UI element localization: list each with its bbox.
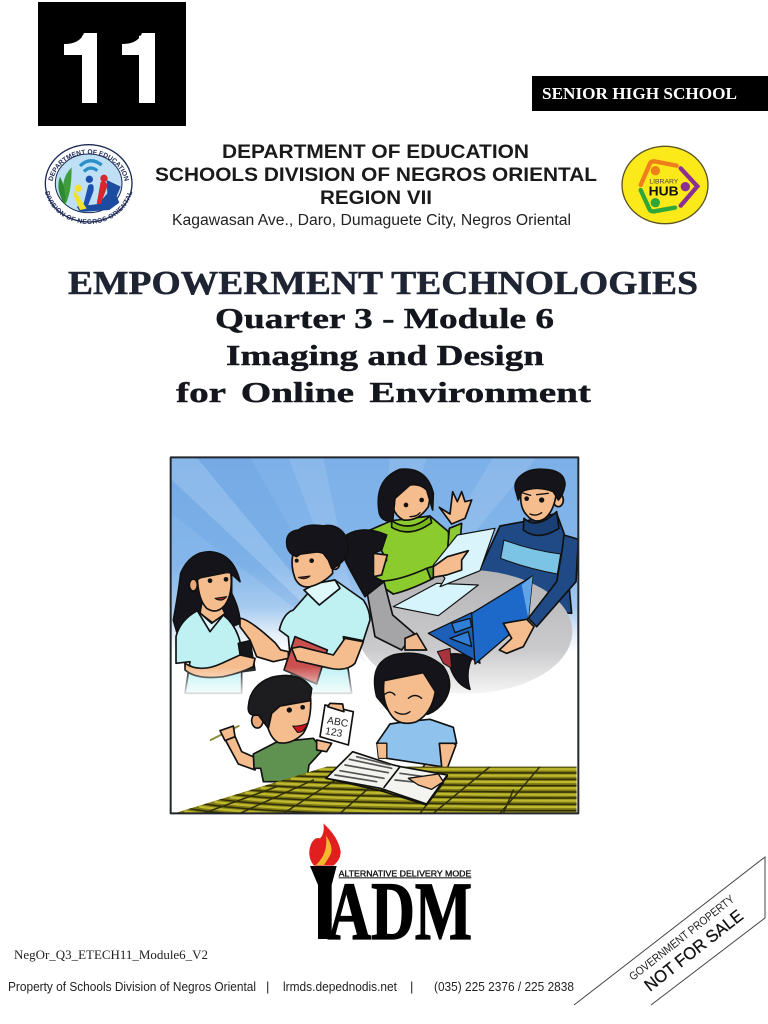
department heading: Kagawasan Ave., Daro, Dumaguete City, Negros Oriental bbox=[172, 212, 571, 229]
icon: alternative delivery mode logo bbox=[309, 823, 472, 957]
man right arm and hand bbox=[499, 535, 578, 653]
green woman pointing arm bbox=[373, 551, 468, 594]
icon: division of negros oriental seal bbox=[44, 144, 133, 224]
grade 11 badge: 1 bbox=[116, 15, 170, 124]
footer contact line: | bbox=[266, 979, 269, 994]
icon: library hub logo bbox=[622, 146, 708, 224]
footer contact line: Property of Schools Division of Negros Oriental bbox=[8, 979, 256, 994]
boy with paper and pencil: 123 bbox=[324, 726, 343, 740]
not for sale corner ribbon: NOT FOR SALE bbox=[641, 906, 747, 995]
subtitle bbox=[176, 304, 592, 409]
icon: library hub logo: HUB bbox=[649, 183, 679, 198]
flame bbox=[309, 823, 341, 866]
department heading: DEPARTMENT OF EDUCATION bbox=[222, 141, 529, 163]
footer contact line: lrmds.depednodis.net bbox=[283, 979, 397, 994]
letters ADM: ADM bbox=[327, 865, 472, 957]
bamboo mat table bbox=[177, 766, 577, 812]
department heading: REGION VII bbox=[320, 187, 432, 209]
subtitle: Imaging and Design bbox=[226, 341, 544, 372]
laptop bbox=[428, 576, 533, 664]
boy with paper and pencil bbox=[211, 676, 353, 782]
icon: division of negros oriental seal: DIVISION OF NEGROS ORIENTAL bbox=[45, 191, 132, 224]
footer contact line bbox=[8, 979, 574, 994]
girl with phone bbox=[173, 552, 288, 693]
fade under upper scene bbox=[172, 667, 359, 698]
man in blue sweater torso bbox=[479, 469, 572, 613]
grade 11 badge: 1 bbox=[59, 15, 113, 124]
subtitle: for Online Environment bbox=[176, 378, 592, 409]
senior high school tag: SENIOR HIGH SCHOOL bbox=[542, 84, 737, 103]
boy with paper and pencil: ABC bbox=[326, 715, 350, 730]
picture frame bbox=[171, 457, 578, 813]
department heading bbox=[155, 141, 597, 229]
senior high school tag bbox=[532, 76, 768, 111]
woman in grey sweater bbox=[345, 530, 427, 650]
footer contact line: | bbox=[410, 979, 413, 994]
module code: NegOr_Q3_ETECH11_Module6_V2 bbox=[14, 947, 208, 962]
torch bbox=[310, 866, 337, 939]
round grey table bbox=[358, 570, 572, 694]
not for sale corner ribbon bbox=[574, 857, 765, 1005]
grade 11 badge bbox=[38, 2, 186, 126]
icon: division of negros oriental seal: DEPARTMENT OF EDUCATION bbox=[48, 149, 130, 181]
sky background with rays bbox=[171, 457, 578, 813]
subtitle: Quarter 3 - Module 6 bbox=[215, 304, 554, 335]
icon: library hub logo: LIBRARY bbox=[649, 179, 679, 186]
papers on table bbox=[393, 528, 495, 616]
young man with book bbox=[279, 525, 370, 693]
open book bbox=[326, 752, 447, 805]
woman in green sweater bbox=[370, 469, 472, 594]
not for sale corner ribbon: GOVERNMENT PROPERTY bbox=[627, 893, 737, 983]
girl reading bbox=[375, 648, 472, 777]
alternative delivery mode text: ALTERNATIVE DELIVERY MODE bbox=[339, 869, 471, 878]
illustration: learners studying together bbox=[171, 457, 578, 826]
department heading: SCHOOLS DIVISION OF NEGROS ORIENTAL bbox=[155, 164, 597, 186]
title: EMPOWERMENT TECHNOLOGIES bbox=[68, 265, 698, 302]
footer contact line: (035) 225 2376 / 225 2838 bbox=[434, 979, 574, 994]
